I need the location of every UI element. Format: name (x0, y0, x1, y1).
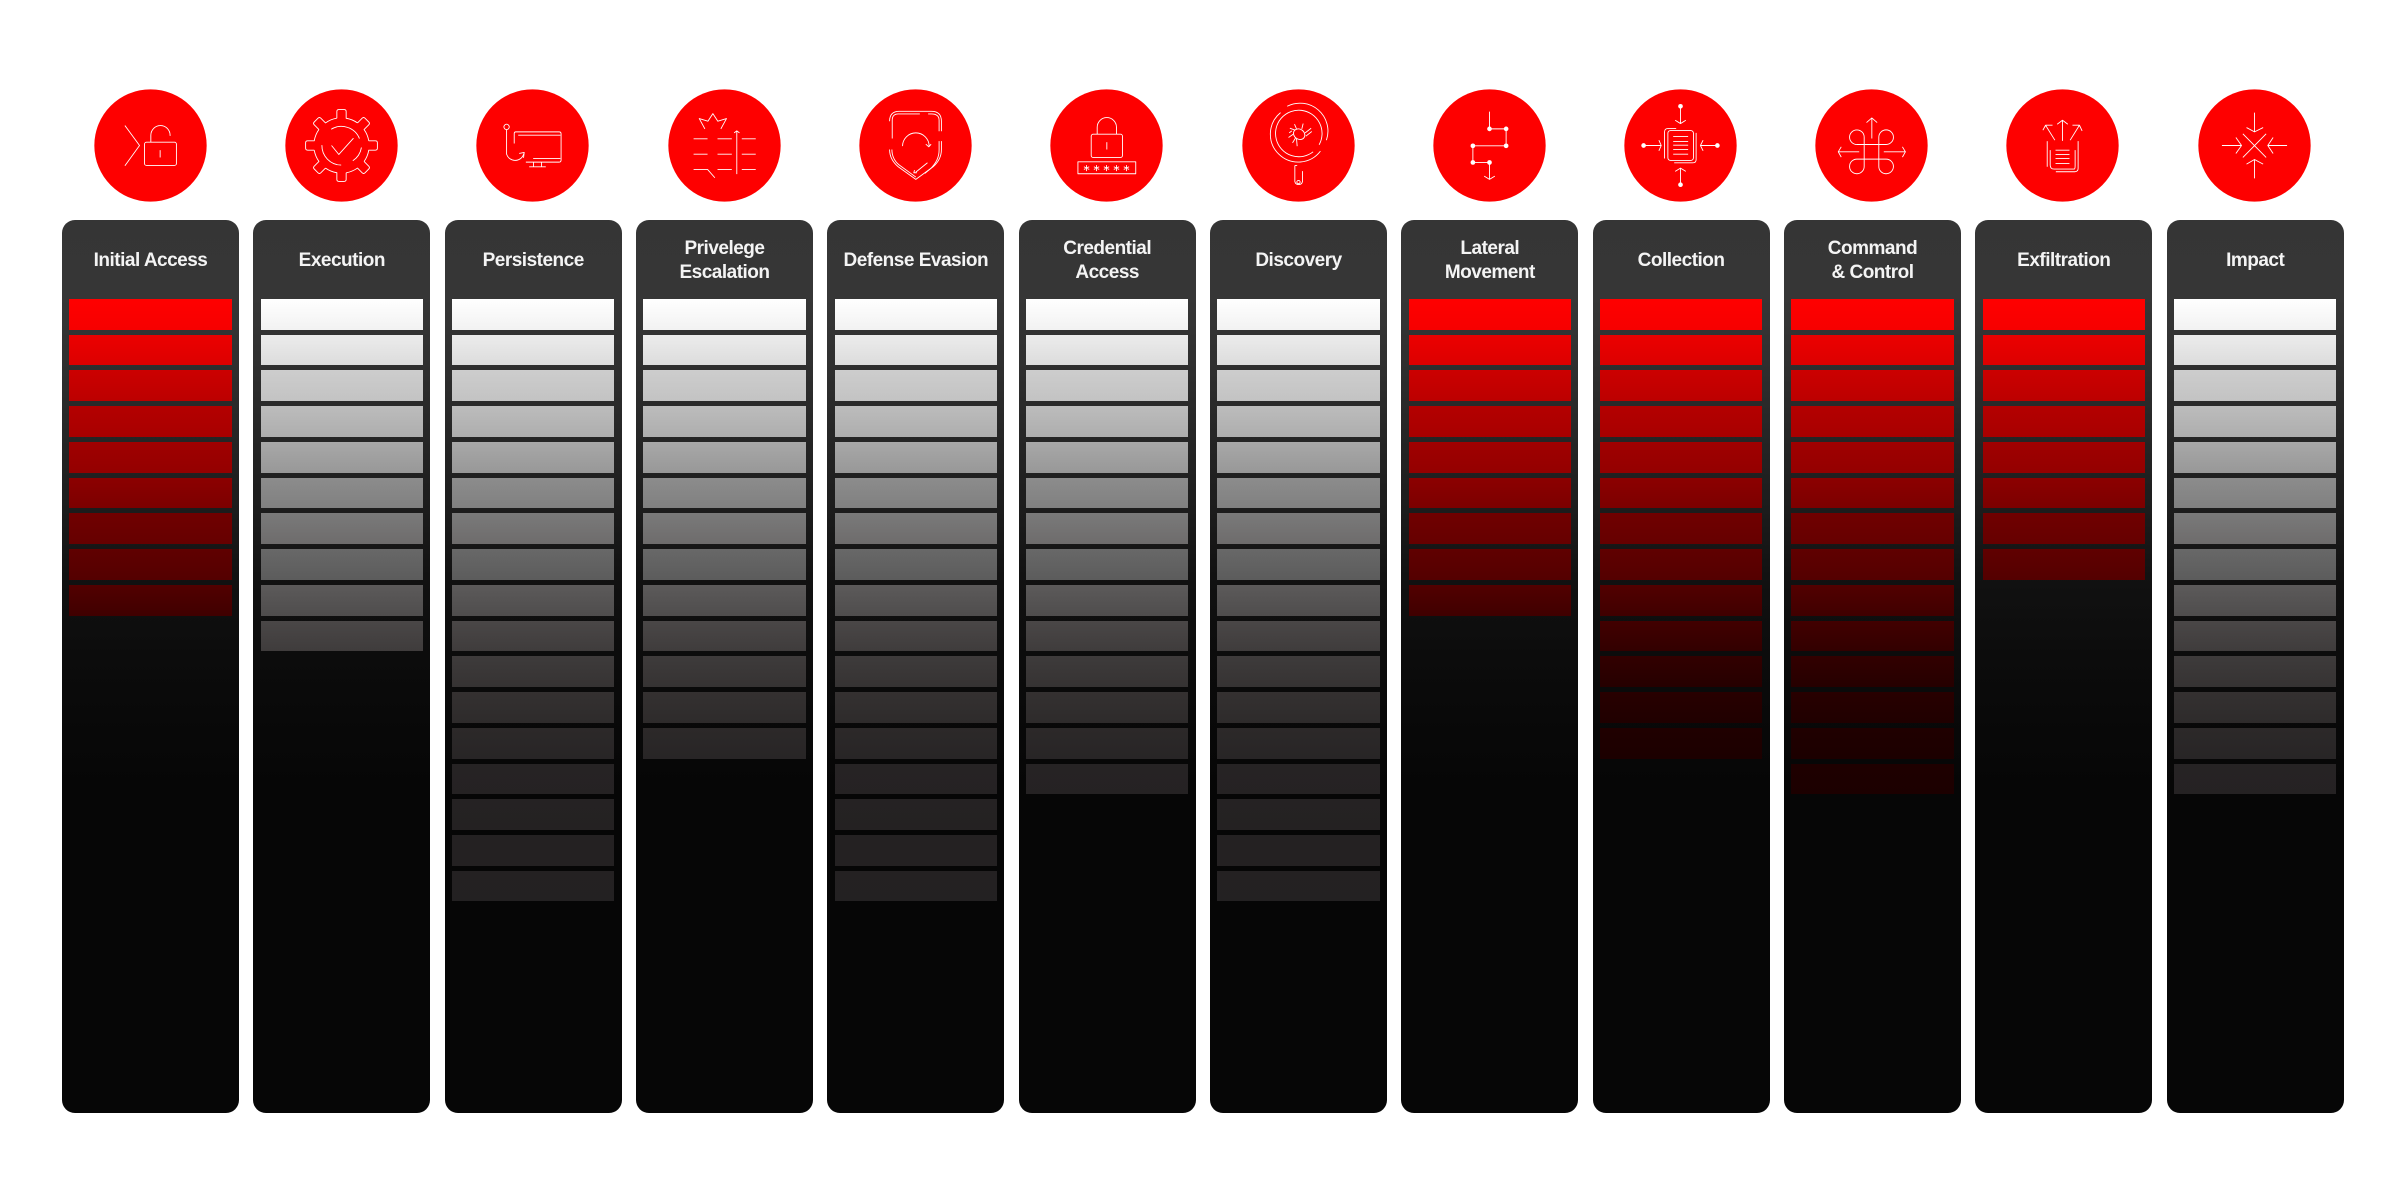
icon: shield with curved arrow (859, 89, 972, 202)
heading: Command & Control: & Control (1831, 262, 1914, 283)
panel: Defense Evasion (827, 220, 1004, 1113)
column: Persistence (445, 89, 622, 1113)
bars: 17 white levels (452, 299, 614, 901)
heading: Command & Control: Command (1828, 238, 1917, 259)
column: Defense Evasion (827, 89, 1004, 1113)
heading: Exfiltration: Exfiltration (2017, 250, 2110, 271)
panel: Initial Access (62, 220, 239, 1113)
column: Privelege Escalation (636, 89, 813, 1113)
icon: padlock with password field (1050, 89, 1163, 202)
icon: document with inward arrows (1624, 89, 1737, 202)
column: Credential Access (1019, 89, 1196, 1113)
panel: Privelege Escalation (636, 220, 813, 1113)
column: Initial Access (62, 89, 239, 1113)
panel: Execution (253, 220, 430, 1113)
icon: chevron and open padlock (94, 89, 207, 202)
column: Collection (1593, 89, 1770, 1113)
bars: 14 white levels (1026, 299, 1188, 794)
bars: 13 red levels (1600, 299, 1762, 759)
icon: command symbol with arrows (1815, 89, 1928, 202)
panel: Exfiltration (1975, 220, 2152, 1113)
heading: Defense Evasion: Defense Evasion (844, 250, 988, 271)
heading: Discovery: Discovery (1255, 250, 1342, 271)
icon: gear with check mark (285, 89, 398, 202)
column: Command & Control (1784, 89, 1961, 1113)
column: Execution (253, 89, 430, 1113)
bars: 9 red levels (1409, 299, 1571, 616)
panel: Command & Control (1784, 220, 1961, 1113)
heading: Command & Control (1828, 238, 1917, 283)
panel: Persistence (445, 220, 622, 1113)
column: Exfiltration (1975, 89, 2152, 1113)
heading: Initial Access: Initial Access (94, 250, 207, 271)
icon: documents with outward arrows (2006, 89, 2119, 202)
panel: Impact (2167, 220, 2344, 1113)
panel: Discovery (1210, 220, 1387, 1113)
heading: Lateral Movement (1445, 238, 1536, 283)
heading: Credential Access: Access (1075, 262, 1139, 283)
bars: 13 white levels (643, 299, 806, 759)
heading: Privelege Escalation: Privelege (684, 238, 764, 259)
heading: Privelege Escalation (679, 238, 770, 283)
heading: Lateral Movement: Movement (1445, 262, 1535, 283)
panel: Collection (1593, 220, 1770, 1113)
bars: 8 red levels (1983, 299, 2145, 580)
heading: Persistence: Persistence (483, 250, 584, 271)
column: Discovery (1210, 89, 1387, 1113)
heading: Privelege Escalation: Escalation (679, 262, 770, 283)
heading: Credential Access: Credential (1063, 238, 1151, 259)
heading: Execution: Execution (299, 250, 385, 271)
column: Lateral Movement (1401, 89, 1578, 1113)
bars: 17 white levels (835, 299, 997, 901)
bars: 14 white levels (2174, 299, 2336, 794)
bars: 10 white levels (261, 299, 423, 651)
bars: 17 white levels (1217, 299, 1380, 901)
panel: Credential Access (1019, 220, 1196, 1113)
icon: stepped path with arrow (1433, 89, 1546, 202)
heading: Impact: Impact (2226, 250, 2284, 271)
bars: 9 red levels (69, 299, 232, 616)
panel: Lateral Movement (1401, 220, 1578, 1113)
icon: magnifying glass with bug (1242, 89, 1355, 202)
icon: fish hook and monitor (476, 89, 589, 202)
column: Impact (2167, 89, 2344, 1113)
bars: 14 red levels (1791, 299, 1954, 794)
heading: Lateral Movement: Lateral (1460, 238, 1519, 259)
icon: crown and rising arrow (668, 89, 781, 202)
heading: Credential Access (1063, 238, 1151, 283)
heading: Collection: Collection (1638, 250, 1725, 271)
icon: cross with converging arrows (2198, 89, 2311, 202)
